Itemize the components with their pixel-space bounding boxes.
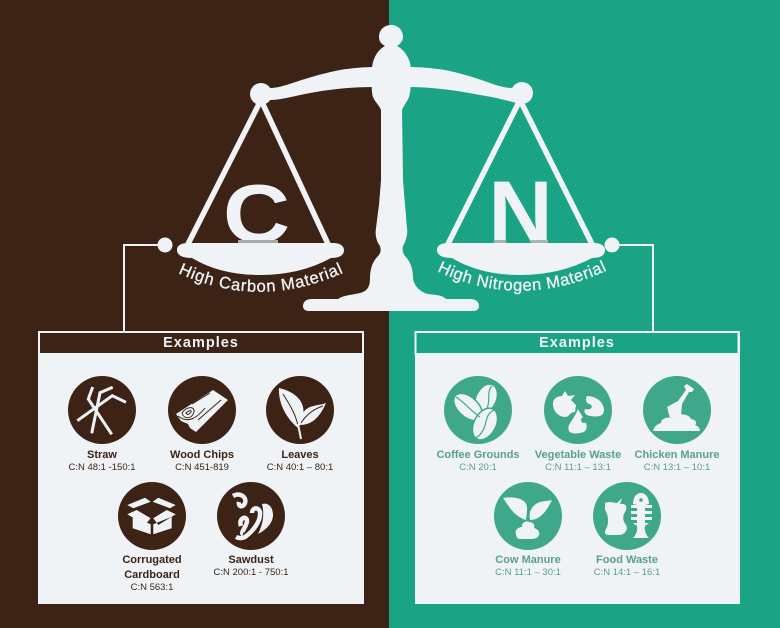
item: coffee grounds: C:N 20:1 bbox=[459, 462, 497, 473]
label: high carbon material: High Carbon Material bbox=[179, 262, 343, 292]
item: chicken manure: Chicken Manure bbox=[635, 449, 719, 461]
item: wood chips: Wood Chips bbox=[170, 449, 234, 461]
item: wood chips bbox=[168, 376, 236, 473]
item: sawdust: Sawdust bbox=[228, 554, 274, 566]
item: cow manure: C:N 11:1 – 30:1 bbox=[495, 567, 561, 578]
item: straw bbox=[68, 376, 136, 473]
label: high nitrogen material: High Nitrogen Material bbox=[438, 260, 606, 294]
item: sawdust: C:N 200:1 - 750:1 bbox=[214, 567, 288, 578]
beam knob: right bbox=[511, 82, 533, 104]
item: food waste: C:N 14:1 – 16:1 bbox=[594, 567, 660, 578]
item: cow manure: Cow Manure bbox=[495, 554, 561, 566]
item: corrugated cardboard: Corrugated bbox=[122, 554, 182, 566]
connector: carbon bbox=[124, 238, 172, 332]
item: food waste bbox=[593, 482, 661, 578]
letter C: C bbox=[223, 167, 290, 260]
panel: carbon examples bbox=[38, 331, 364, 604]
item: straw: C:N 48:1 -150:1 bbox=[68, 462, 136, 473]
item: straw: Straw bbox=[87, 449, 117, 461]
item: corrugated cardboard: Cardboard bbox=[124, 569, 180, 581]
left pan bbox=[177, 243, 344, 275]
item: cow manure bbox=[494, 482, 562, 578]
item: corrugated cardboard bbox=[118, 482, 186, 593]
panel: nitrogen examples bbox=[415, 331, 740, 604]
heading: examples: Examples bbox=[163, 335, 239, 351]
balance scale bbox=[177, 25, 605, 311]
letter C shadow bbox=[238, 240, 278, 243]
background: nitrogen side bbox=[389, 0, 780, 628]
left pan strings bbox=[188, 100, 328, 244]
heading: examples: Examples bbox=[539, 335, 615, 351]
item: vegetable waste: Vegetable Waste bbox=[535, 449, 621, 461]
item: leaves: C:N 40:1 – 80:1 bbox=[267, 462, 333, 473]
item: vegetable waste bbox=[535, 376, 621, 473]
item: leaves bbox=[266, 376, 334, 473]
item: leaves: Leaves bbox=[281, 449, 319, 461]
right pan strings bbox=[448, 100, 592, 244]
letter N shadow bbox=[494, 240, 548, 243]
item: chicken manure bbox=[635, 376, 719, 473]
panel body bbox=[38, 331, 364, 604]
scale column bbox=[303, 25, 479, 311]
letter N: N bbox=[488, 162, 553, 262]
item: wood chips: C:N 451-819 bbox=[175, 462, 229, 473]
item: coffee grounds: Coffee Grounds bbox=[436, 449, 520, 461]
connector: nitrogen bbox=[604, 238, 653, 332]
item: coffee grounds bbox=[436, 376, 520, 473]
panel header bbox=[39, 332, 363, 354]
scale beam bbox=[270, 67, 522, 104]
beam knob: left bbox=[250, 83, 272, 105]
panel body bbox=[415, 331, 740, 604]
item: food waste: Food Waste bbox=[596, 554, 658, 566]
panel header bbox=[416, 332, 738, 354]
right pan bbox=[437, 243, 605, 275]
background: carbon side bbox=[0, 0, 389, 628]
item: corrugated cardboard: C:N 563:1 bbox=[131, 582, 173, 593]
item: sawdust bbox=[214, 482, 288, 578]
item: vegetable waste: C:N 11:1 – 13:1 bbox=[545, 462, 611, 473]
item: chicken manure: C:N 13:1 – 10:1 bbox=[644, 462, 710, 473]
